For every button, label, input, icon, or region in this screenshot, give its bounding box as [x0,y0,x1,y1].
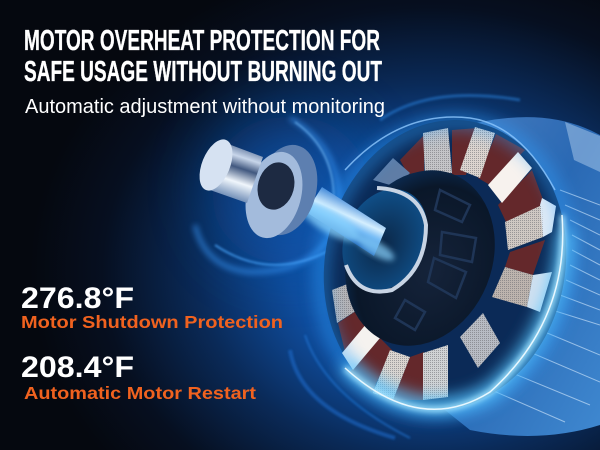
spec: restart temperature: 208.4°F [21,351,134,384]
tooth: bottom left [373,350,410,400]
title [24,25,382,88]
spec: shutdown temperature: 276.8°F [21,282,134,315]
tooth texture [332,127,543,400]
subtitle: Automatic adjustment without monitoring [25,96,385,118]
tooth: bright lower left [342,323,380,370]
tooth: lower right [492,267,533,307]
tooth: bright upper right [488,152,532,203]
rotor hub [320,148,520,368]
stator teeth [332,127,556,400]
stator copper windings [338,128,545,400]
tooth: left [332,283,362,323]
tooth: top right [460,127,495,178]
spec: shutdown temperature: Motor Shutdown Protection [21,312,283,332]
tooth: right [505,205,543,250]
shaft bearing [193,135,327,244]
motor stator housing [297,97,600,436]
tooth: bottom right [460,313,500,368]
title: SAFE USAGE WITHOUT BURNING OUT [24,56,382,88]
silver cap rim [346,188,426,292]
spec: shutdown temperature [21,282,283,332]
tooth: upper left [373,158,410,187]
glowing ring [289,93,600,439]
tooth: bottom [423,345,448,400]
spec: restart temperature [21,351,256,403]
blue energy swirls [195,96,520,438]
rotor shaft [295,187,398,265]
tooth: top [423,128,452,175]
spec: restart temperature: Automatic Motor Restart [24,383,256,403]
title: MOTOR OVERHEAT PROTECTION FOR [24,25,380,57]
front cap [326,175,444,305]
